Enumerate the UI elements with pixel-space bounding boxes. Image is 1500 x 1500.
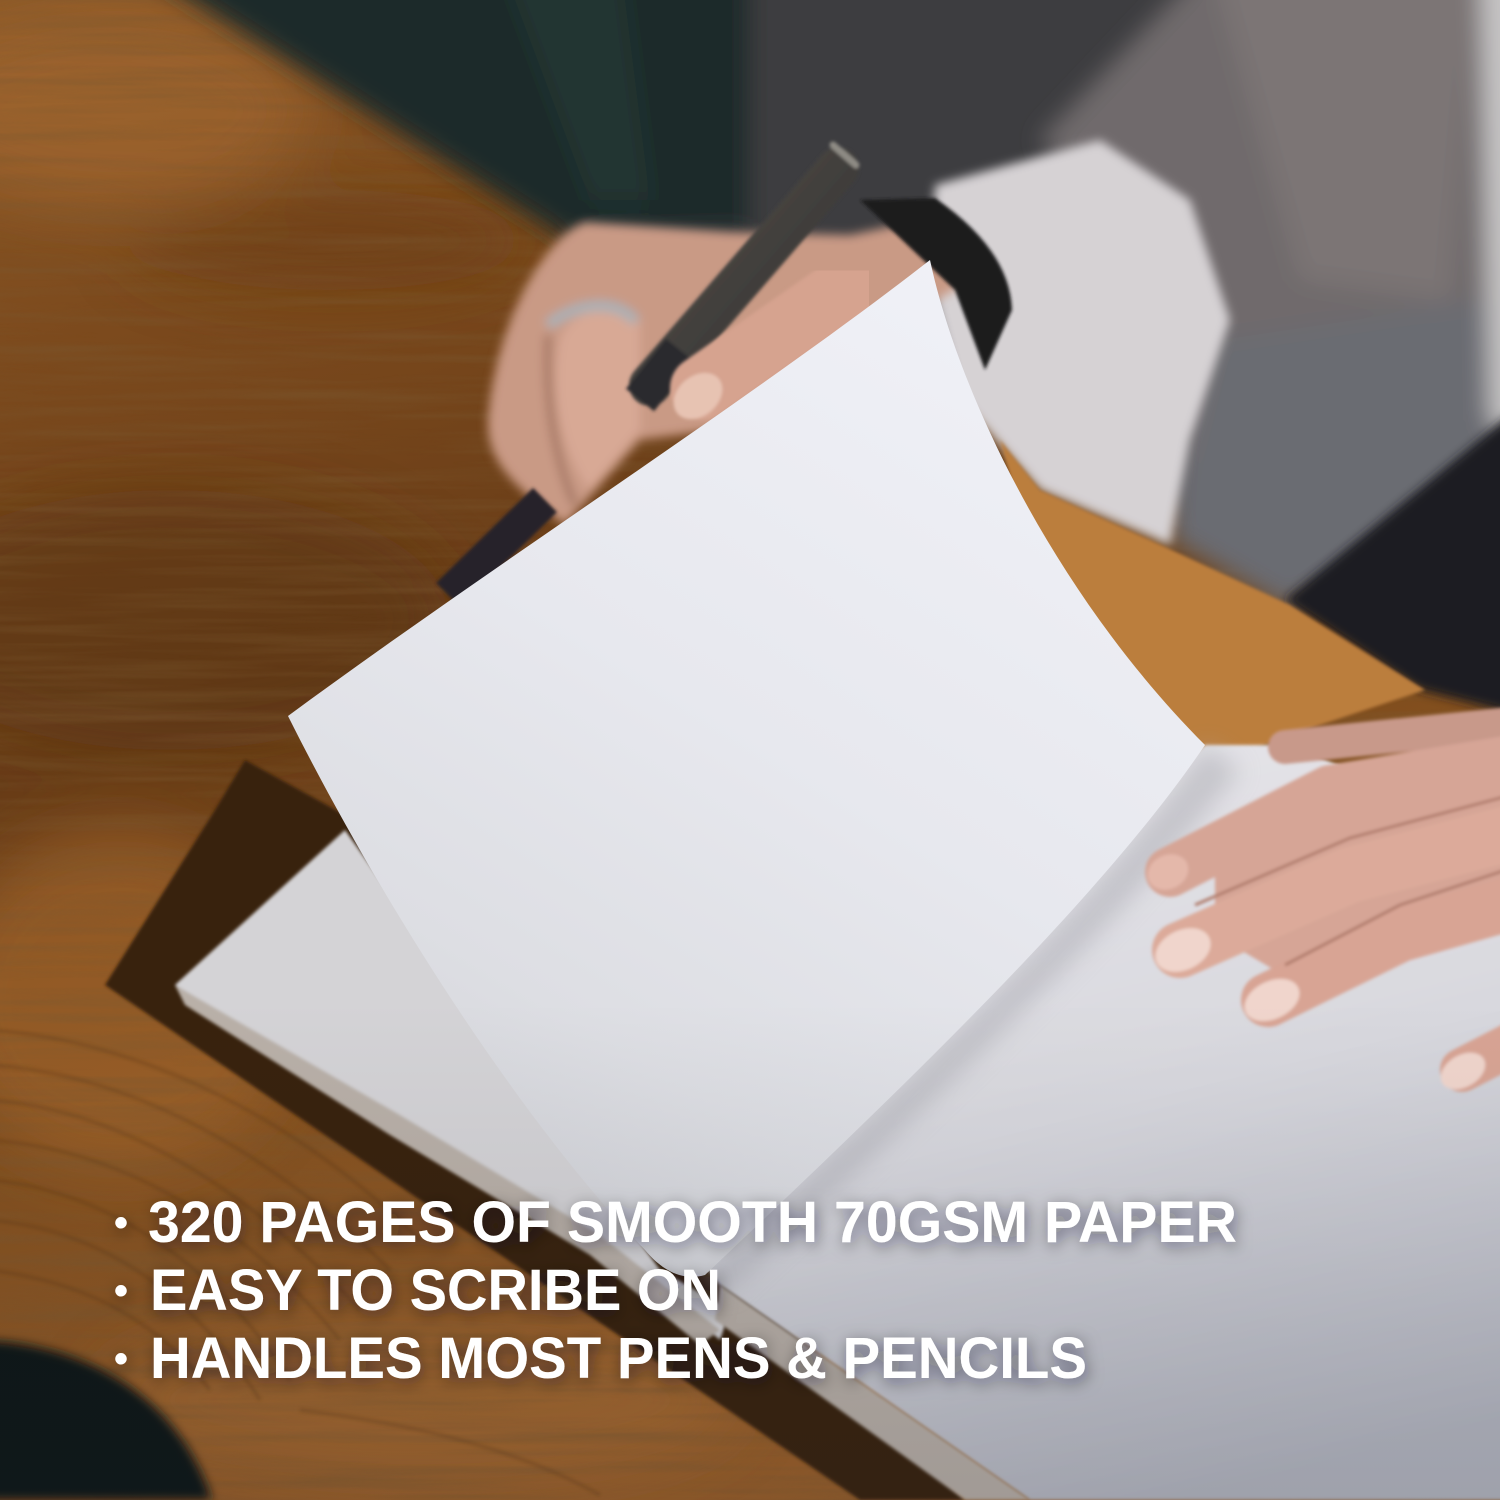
right page block edge	[715, 1285, 1030, 1500]
bullet item 2: EASY TO SCRIBE ON	[150, 1258, 721, 1323]
thumb on pen	[664, 285, 850, 429]
tan notebook cover behind page	[1000, 440, 1425, 770]
photo background: dark plant and wall	[130, 0, 1500, 720]
raised white page	[288, 260, 1240, 1295]
white shirt cuff	[930, 140, 1230, 545]
dark clothing at right	[1285, 390, 1500, 720]
right notebook page	[640, 745, 1500, 1500]
left page with page block	[175, 830, 730, 1345]
bullet item 1: •	[114, 1201, 128, 1245]
smartwatch band	[860, 198, 1012, 370]
sweater sleeve	[1040, 0, 1500, 610]
leather cover	[105, 760, 965, 1500]
bullet item 3: HANDLES MOST PENS & PENCILS	[150, 1326, 1087, 1391]
right hand on page	[1142, 722, 1500, 1097]
upper hand holding pen	[488, 215, 962, 525]
bullet item 3: •	[114, 1337, 128, 1381]
dark mug in corner	[0, 1340, 212, 1500]
feature list	[114, 1190, 1237, 1391]
pen	[448, 145, 856, 595]
bullet item 1: 320 PAGES OF SMOOTH 70GSM PAPER	[148, 1190, 1237, 1255]
bottom shade overlay	[0, 1000, 1500, 1500]
bullet item 2: •	[114, 1269, 128, 1313]
